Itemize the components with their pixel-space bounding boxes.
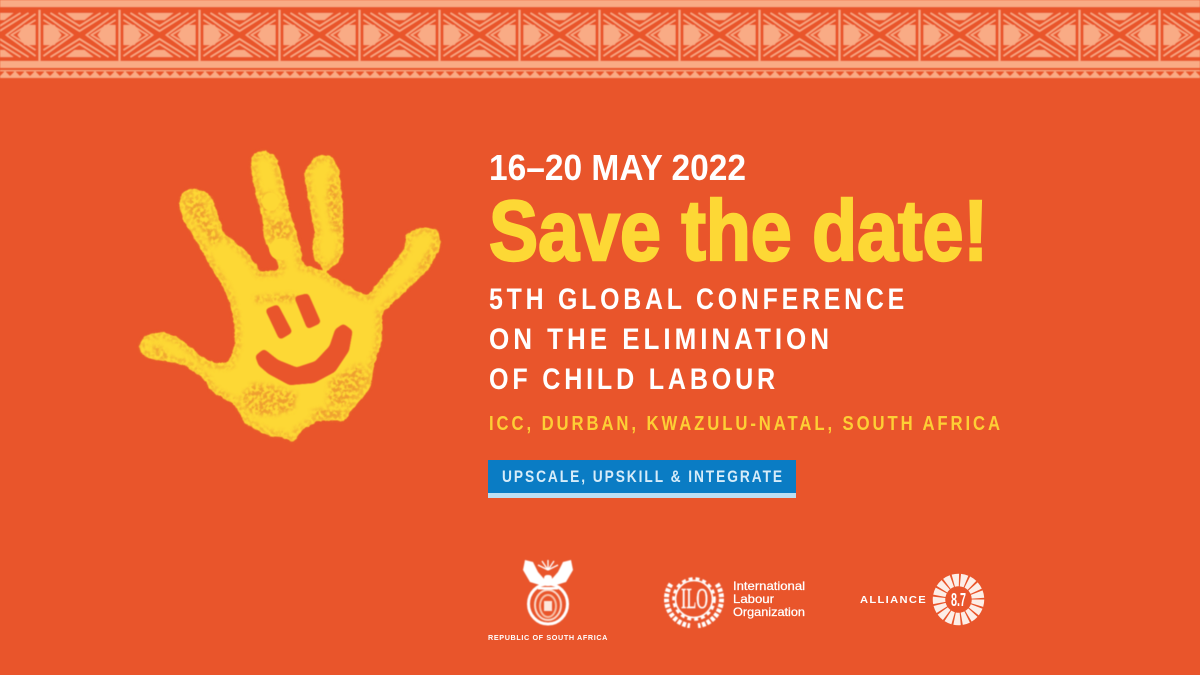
conference title [489,283,908,396]
eyes and smile [258,296,350,383]
ILO name: Labour [733,592,774,606]
icon: yellow child handprint with smiley face [142,154,438,439]
conference title: 5TH GLOBAL CONFERENCE [489,283,908,316]
logo: Alliance 8.7: 8.7 [951,590,966,610]
date: 16–20 MAY 2022 [489,147,746,188]
heading: Save the date!: Save the date! [489,184,988,279]
logo: Alliance 8.7: ALLIANCE [860,595,927,606]
ILO name [733,579,805,619]
theme banner: UPSCALE, UPSKILL & INTEGRATE [502,467,784,486]
logo: International Labour Organization emblem [666,578,722,626]
logo: Alliance 8.7 [860,580,978,619]
logo: International Labour Organization emblem: ILO [681,584,708,615]
logo: Republic of South Africa coat of arms [523,560,573,624]
ILO name: Organization [733,605,805,619]
venue: ICC, DURBAN, KWAZULU-NATAL, SOUTH AFRICA [489,413,1003,435]
ILO name: International [733,579,805,593]
decorative patterned top band [0,0,1200,78]
caption: Republic of South Africa: REPUBLIC OF SOUTH AFRICA [488,635,608,642]
conference title: OF CHILD LABOUR [489,363,779,396]
theme banner [488,460,796,498]
conference title: ON THE ELIMINATION [489,323,833,356]
